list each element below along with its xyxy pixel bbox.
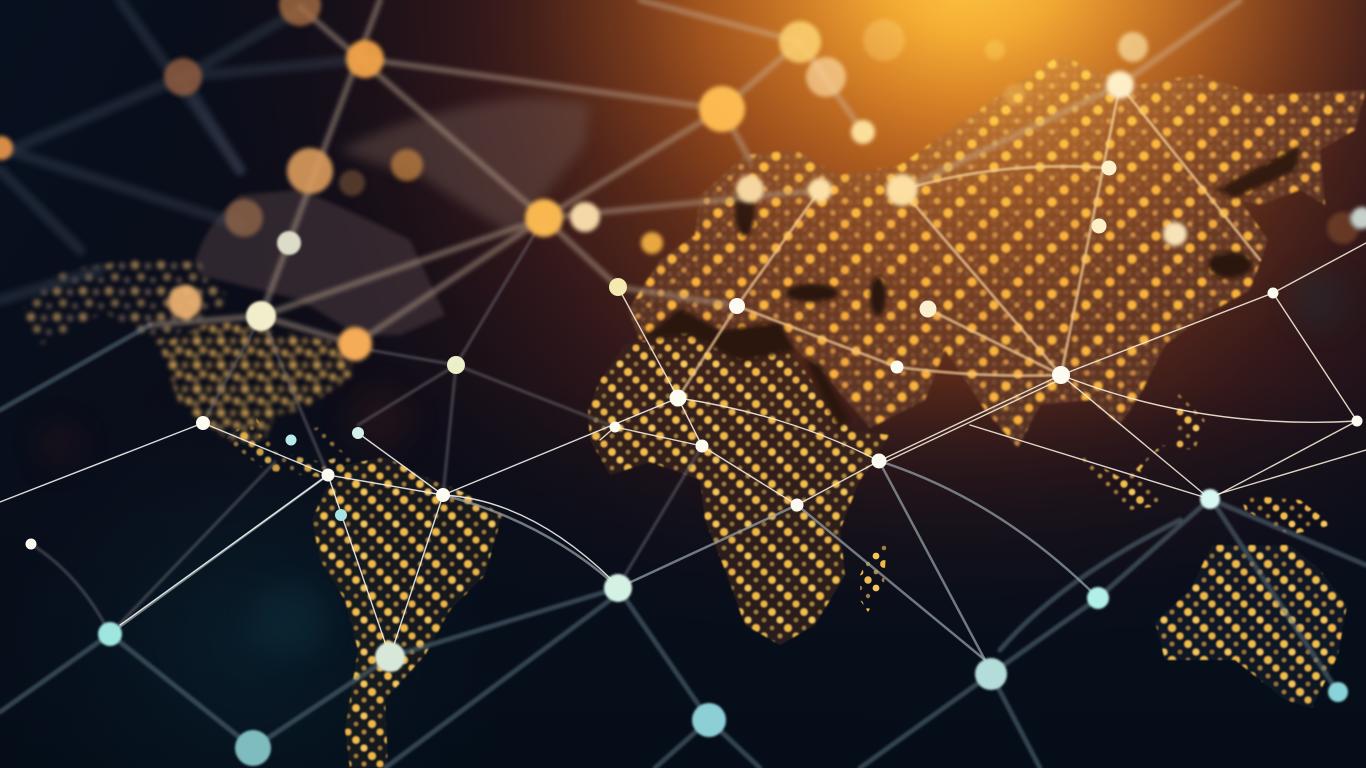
grey links, Africa and Indian Ocean <box>110 461 1098 660</box>
white links, Americas <box>0 398 678 657</box>
continent: Central America, arc of dots <box>225 415 362 490</box>
continent: Southeast Asia islands <box>1080 390 1332 535</box>
continent: South America <box>312 457 502 768</box>
continent: North America, faded <box>20 190 445 445</box>
network: sharp bright links <box>0 85 1366 660</box>
continent: Eurasia <box>628 55 1366 448</box>
nodes: large teal glowing <box>98 489 1348 766</box>
nodes: blurred amber <box>0 0 1366 361</box>
warm mid-weight links, Eurasia <box>678 85 1260 398</box>
sea: Mediterranean and inland seas <box>640 145 1300 428</box>
cool links, lower half <box>0 325 1366 768</box>
sun glow overlay <box>0 0 1366 420</box>
warm links, upper half <box>150 0 1240 344</box>
continent: Madagascar <box>860 537 887 612</box>
continent: Africa <box>588 330 890 645</box>
dim links around the Atlantic <box>31 218 702 634</box>
nodes: small bright <box>26 160 1362 550</box>
continent: Australia <box>1155 545 1347 708</box>
dark links, upper left <box>0 0 365 300</box>
white links, Africa and Eurasia <box>600 243 1366 505</box>
continent: Greenland, faded <box>340 98 590 235</box>
